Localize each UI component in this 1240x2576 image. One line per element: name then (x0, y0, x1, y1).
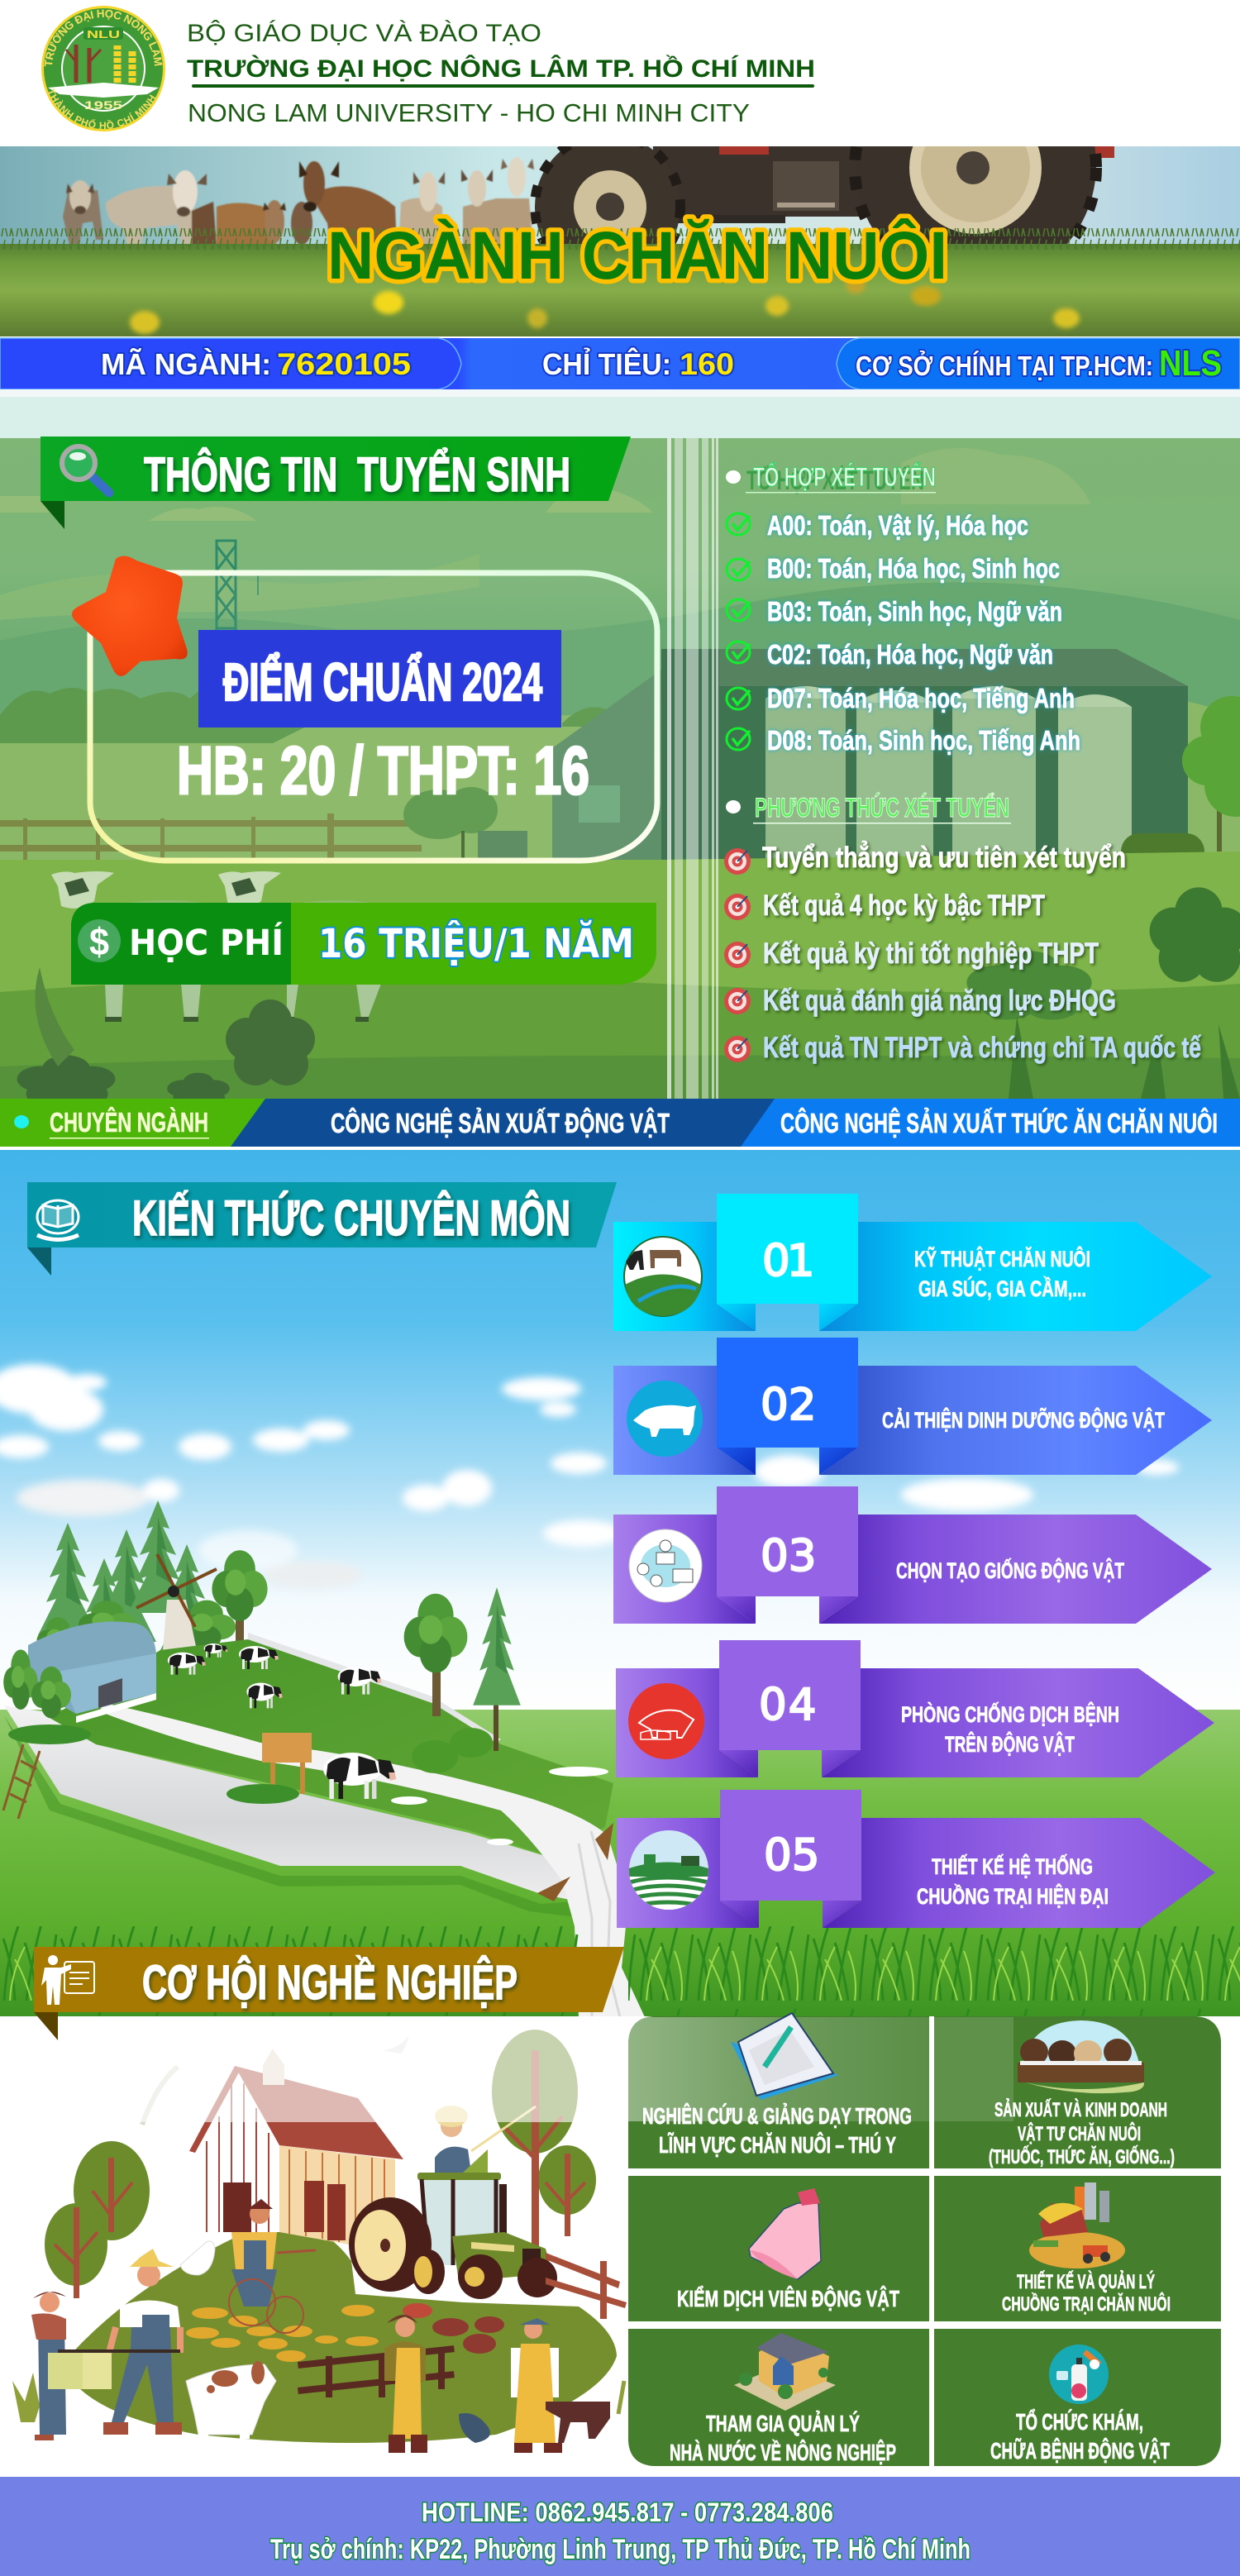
campus code: NLS (1159, 343, 1222, 384)
label (642, 2102, 912, 2158)
icon: vaccine circle (1049, 2345, 1109, 2404)
combination A00: A00: Toán, Vật lý, Hóa học (767, 510, 1028, 541)
panel: admissions information (0, 397, 1240, 1107)
icon: modern farm (629, 1830, 708, 1910)
career card 5 (628, 2329, 929, 2466)
careers grid (628, 2013, 1221, 2466)
heading: CƠ HỘI NGHỀ NGHIỆP (142, 1956, 517, 2010)
seated farmer (229, 2199, 316, 2333)
cow (186, 2361, 276, 2439)
windmill (136, 1554, 217, 1650)
grass (0, 228, 1240, 336)
method 1: Tuyển thẳng và ưu tiên xét tuyển (762, 841, 1126, 874)
farm illustration (0, 2016, 628, 2453)
clouds (0, 1364, 1179, 1588)
label: NGHIÊN CỨU & GIẢNG DẠY TRONG (642, 2102, 912, 2129)
lower grass blades (0, 1926, 579, 2017)
campus code: CƠ SỞ CHÍNH TẠI TP.HCM: (856, 351, 1153, 381)
barn and silos (661, 649, 1188, 867)
icon: magnifier (62, 446, 109, 493)
career card 6 (934, 2329, 1221, 2466)
list heading (746, 462, 936, 495)
major code: MÃ NGÀNH: (101, 346, 271, 381)
label: KỸ THUẬT CHĂN NUÔI (914, 1246, 1090, 1271)
score title box: ĐIỂM CHUẨN 2024 (223, 651, 542, 712)
subject combinations list (726, 462, 1080, 756)
tuition amount: 16 TRIỆU/1 NĂM (318, 920, 634, 967)
power tower (194, 541, 258, 727)
quota (542, 346, 734, 381)
number: 03 (761, 1531, 816, 1581)
bushes and ivy (8, 1724, 493, 1804)
ground (0, 852, 1240, 1099)
cattle herd (63, 157, 534, 248)
tuition label: HỌC PHÍ (129, 922, 284, 964)
label: CHUỒNG TRẠI HIỆN ĐẠI (917, 1883, 1109, 1909)
icon: sick pig (628, 1683, 704, 1759)
label (1002, 2269, 1171, 2316)
combination D07: D07: Toán, Hóa học, Tiếng Anh (767, 683, 1075, 713)
method 4: Kết quả đánh giá năng lực ĐHQG (763, 985, 1116, 1017)
combination B03: B03: Toán, Sinh học, Ngữ văn (767, 596, 1062, 627)
icon: government building (734, 2333, 836, 2411)
wood edge (537, 1823, 613, 1901)
panel: professional knowledge (0, 1150, 1240, 2017)
tuition bar (71, 903, 656, 985)
english university name: NONG LAM UNIVERSITY - HO CHI MINH CITY (188, 98, 750, 127)
label: NHÀ NƯỚC VỀ NÔNG NGHIỆP (670, 2439, 896, 2465)
number: 01 (762, 1236, 814, 1286)
heading: THÔNG TIN TUYỂN SINH (144, 448, 570, 502)
label: THAM GIA QUẢN LÝ (706, 2410, 860, 2436)
list heading: TỔ HỢP XÉT TUYỂN (746, 465, 924, 495)
icon: dollar (78, 919, 121, 963)
main title: NGÀNH CHĂN NUÔI (327, 218, 947, 293)
icon: livestock on farm (624, 1237, 702, 1316)
label: PHÒNG CHỐNG DỊCH BỆNH (901, 1701, 1119, 1727)
right tree (1182, 696, 1240, 852)
scores: HB: 20 / THPT: 16 (177, 733, 589, 809)
label (990, 2409, 1170, 2464)
sky bird and sprig (142, 2035, 409, 2125)
barn (189, 2049, 403, 2253)
corn crops (186, 2305, 379, 2362)
icon: book and pen (731, 2013, 839, 2100)
label (917, 1853, 1109, 1909)
milk stream (99, 1703, 645, 2017)
address: Trụ sở chính: KP22, Phường Linh Trung, TP Thủ Đức, TP. Hồ Chí Minh (270, 2534, 971, 2565)
label: LĨNH VỰC CHĂN NUÔI – THÚ Y (659, 2131, 896, 2158)
left house (552, 670, 727, 867)
arrow card 04 (616, 1640, 1214, 1777)
methods heading: PHƯƠNG THỨC XÉT TUYỂN (755, 793, 1009, 823)
quota: CHỈ TIÊU: (542, 346, 671, 381)
major code: 7620105 (277, 347, 411, 381)
milk road island illustration (3, 1500, 645, 2017)
goose (180, 2241, 215, 2275)
man in yellow overalls (511, 2318, 562, 2453)
key facts band (0, 338, 1240, 389)
conifer trees (36, 1500, 236, 1671)
bird (459, 2413, 490, 2443)
label: THIẾT KẾ HỆ THỐNG (932, 1853, 1093, 1879)
tractor (530, 146, 1114, 244)
career card 2 (934, 2016, 1221, 2168)
wooden sign (262, 1733, 312, 1794)
label (989, 2097, 1175, 2168)
career card 3 (628, 2176, 929, 2321)
icon: cattle at trough (1018, 2020, 1144, 2093)
label: GIA SÚC, GIA CẦM,... (918, 1276, 1086, 1301)
fence (0, 813, 422, 860)
icon: farmer and animals (629, 1529, 702, 1602)
silhouettes of cows (51, 871, 381, 1022)
combination C02: C02: Toán, Hóa học, Ngữ văn (767, 639, 1053, 670)
combination D08: D08: Toán, Sinh học, Tiếng Anh (767, 725, 1080, 756)
small deer (546, 2402, 610, 2443)
icon: pink bottle (749, 2188, 821, 2279)
icon: university logo: 1955 (84, 98, 122, 112)
woman in yellow overalls (384, 2315, 427, 2453)
white translucent overlay (0, 2016, 628, 2122)
label: CHỌN TẠO GIỐNG ĐỘNG VẬT (896, 1557, 1124, 1583)
footer contact band (0, 2477, 1240, 2576)
farmer with overalls left (31, 2292, 112, 2440)
icon: dollar: $ (89, 920, 109, 963)
hotline: HOTLINE: 0862.945.817 - 0773.284.806 (422, 2497, 833, 2527)
icon: farm diorama (1029, 2182, 1125, 2268)
arrow card 05 (617, 1790, 1215, 1928)
panel: career opportunities (0, 1947, 1240, 2477)
heading: KIẾN THỨC CHUYÊN MÔN (132, 1190, 570, 1246)
label: VẬT TƯ CHĂN NUÔI (1018, 2122, 1141, 2145)
island shadow (4, 1715, 583, 1918)
icon: red star (72, 556, 188, 676)
island lawn (50, 1639, 613, 1858)
label: specialisations: CHUYÊN NGÀNH (50, 1107, 208, 1138)
career card 1 (628, 2013, 929, 2168)
section ribbon: careers (34, 1947, 624, 2040)
arrow card 01 (613, 1194, 1212, 1331)
cut-off score frame (72, 556, 657, 861)
hero banner with cattle and tractor (0, 146, 1240, 337)
section ribbon: admissions (41, 436, 631, 529)
score title box (198, 630, 561, 727)
barn (3, 1622, 156, 1723)
cows on lawn (168, 1643, 396, 1799)
right trees (492, 2030, 596, 2249)
label: TỔ CHỨC KHÁM, (1016, 2409, 1143, 2435)
label (901, 1701, 1119, 1757)
specialisation 1: CÔNG NGHỆ SẢN XUẤT ĐỘNG VẬT (331, 1107, 670, 1138)
icon: university logo: NLU (87, 28, 120, 41)
section ribbon: knowledge (27, 1182, 617, 1276)
list heading: TỔ HỢP XÉT TUYỂN (753, 462, 936, 492)
combination B00: B00: Toán, Hóa học, Sinh học (767, 553, 1060, 584)
island base (4, 1705, 579, 1901)
mushrooms (403, 2303, 504, 2354)
method 2: Kết quả 4 học kỳ bậc THPT (763, 890, 1045, 922)
number: 02 (761, 1380, 816, 1430)
white vertical stripes (667, 438, 718, 1099)
label: KIỂM DỊCH VIÊN ĐỘNG VẬT (677, 2285, 899, 2311)
admission methods list (724, 793, 1201, 1064)
quota: 160 (680, 347, 734, 381)
round tree (212, 1550, 268, 1647)
label: THIẾT KẾ VÀ QUẢN LÝ (1017, 2269, 1155, 2293)
arrow card 03 (613, 1486, 1212, 1624)
ministry name: BỘ GIÁO DỤC VÀ ĐÀO TẠO (187, 19, 541, 47)
dark bushes (17, 887, 1240, 1107)
header white band (0, 0, 1240, 146)
right trees (404, 1587, 521, 1751)
woman on tractor (435, 2106, 536, 2173)
icon: pig (627, 1381, 703, 1457)
major code (101, 346, 411, 381)
ladder (3, 1744, 40, 1819)
career card 4 (934, 2176, 1221, 2321)
label (914, 1246, 1090, 1301)
small tree behind frame (403, 787, 498, 860)
icon: university logo: TRƯỜNG ĐẠI HỌC NÔNG LÂM (45, 10, 162, 66)
left trees (45, 2141, 150, 2298)
fence (298, 2253, 627, 2397)
icon: university logo (41, 6, 165, 131)
icon: presenter (41, 1955, 94, 2005)
tractor (349, 2173, 557, 2299)
farm scene background (0, 438, 1240, 1107)
icon: university logo: THÀNH PHỐ HỒ CHÍ MINH (48, 88, 155, 129)
arrow card 02 (613, 1338, 1212, 1475)
label: TRÊN ĐỘNG VẬT (945, 1731, 1075, 1757)
left plants (12, 2373, 624, 2422)
label (670, 2410, 896, 2465)
university name: TRƯỜNG ĐẠI HỌC NÔNG LÂM TP. HỒ CHÍ MINH (187, 55, 815, 83)
specialisations bar (0, 1099, 1240, 1147)
number: 04 (759, 1680, 816, 1730)
method 3: Kết quả kỳ thi tốt nghiệp THPT (763, 937, 1099, 970)
flowers (391, 1767, 608, 1845)
number: 05 (764, 1830, 819, 1881)
hill (62, 2222, 617, 2443)
icon: book (37, 1200, 79, 1240)
farmer with hat (58, 2249, 182, 2435)
